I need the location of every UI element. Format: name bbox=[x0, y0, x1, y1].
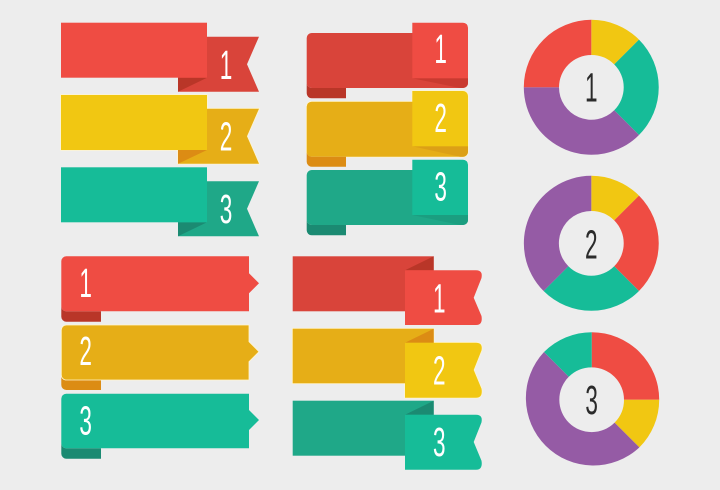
ribbon 2 yellow bbox=[61, 325, 259, 390]
donut chart 3 bbox=[526, 332, 659, 466]
ribbon 3 green bbox=[293, 401, 482, 470]
ribbon 1 red bbox=[61, 23, 259, 92]
ribbon 2 yellow bbox=[307, 91, 468, 167]
panel: flag ribbons, top left bbox=[61, 23, 259, 236]
ribbon 1 red: 1 bbox=[79, 261, 92, 307]
ribbon 3 green bbox=[61, 167, 259, 236]
ribbon 2 yellow bbox=[61, 95, 259, 164]
panel: folded ribbons, top middle bbox=[307, 23, 468, 235]
donut chart 1: 1 bbox=[585, 66, 598, 112]
ribbon 1 red: 1 bbox=[433, 276, 446, 322]
ribbon 2 yellow bbox=[293, 329, 482, 398]
donut chart 3: 3 bbox=[585, 378, 598, 424]
ribbon 3 green: 3 bbox=[433, 420, 446, 466]
panel: arrow ribbons, bottom left bbox=[61, 256, 259, 459]
ribbon 3 green bbox=[307, 160, 468, 235]
donut chart 2 bbox=[524, 176, 659, 311]
ribbon 1 red bbox=[307, 23, 468, 98]
ribbon 2 yellow: 2 bbox=[220, 115, 232, 161]
donut chart 1 bbox=[524, 20, 659, 155]
ribbon 3 green: 3 bbox=[434, 165, 447, 211]
ribbon 2 yellow: 2 bbox=[434, 96, 447, 142]
ribbon 3 green: 3 bbox=[220, 187, 232, 233]
ribbon 2 yellow: 2 bbox=[433, 349, 446, 395]
ribbon 3 green bbox=[61, 394, 259, 459]
ribbon 1 red: 1 bbox=[434, 27, 447, 73]
ribbon 1 red bbox=[293, 256, 482, 325]
ribbon 2 yellow: 2 bbox=[79, 329, 92, 375]
ribbon 3 green: 3 bbox=[79, 399, 92, 445]
ribbon 1 red: 1 bbox=[220, 43, 232, 89]
donut chart 2: 2 bbox=[585, 222, 598, 268]
panel: folded flags, bottom middle bbox=[293, 256, 482, 470]
ribbon 1 red bbox=[61, 256, 259, 322]
